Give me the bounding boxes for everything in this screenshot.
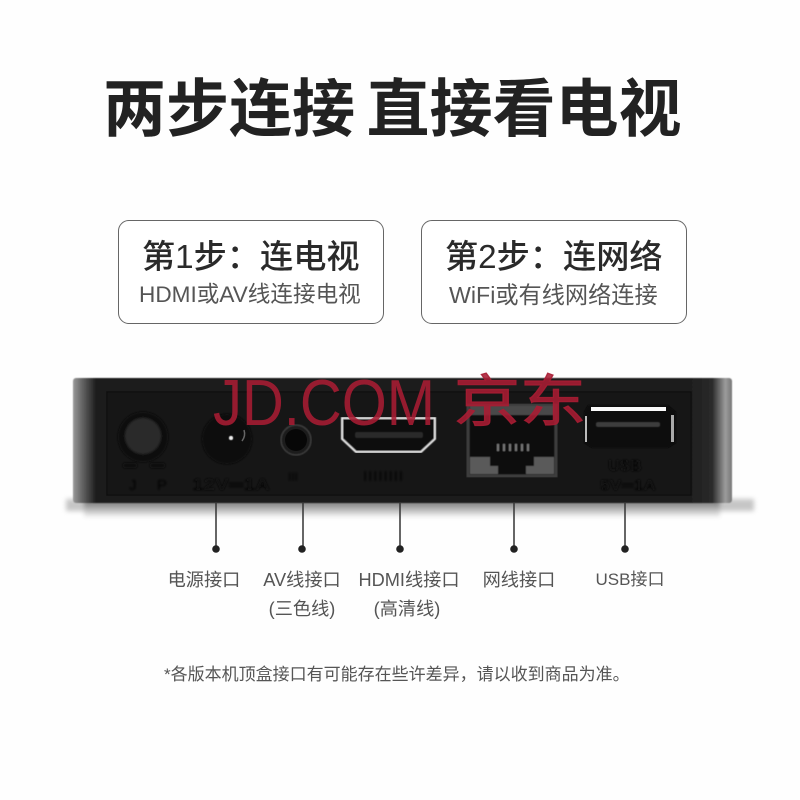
label: tricolor cable: (三色线): [269, 599, 335, 619]
label: HDMI: HDMI线接口: [358, 570, 460, 590]
port: USB: 5V═1A: [600, 477, 656, 494]
port: power button: [118, 412, 168, 494]
step 1 description: HDMI或AV线连接电视: [139, 282, 361, 307]
port: HDMI: IIIIIIII: [363, 468, 403, 485]
watermark: JD.COM: [213, 366, 586, 439]
label: AV: AV线接口: [263, 570, 341, 590]
port: AV jack: [281, 425, 311, 484]
panel: step 2: [421, 220, 687, 324]
step 1 heading: 第1步：连电视: [142, 239, 360, 276]
port: HDMI: [342, 418, 435, 485]
port: USB: USB: [608, 458, 642, 475]
label: power: 电源接口: [168, 570, 240, 590]
label: HD cable: (高清线): [374, 599, 440, 619]
device body: [73, 378, 732, 503]
label: USB: USB接口: [596, 570, 664, 589]
port: AV jack: III: [288, 470, 298, 484]
port: power button: J: [129, 477, 136, 494]
connector leaders: [212, 503, 629, 553]
port: USB: [584, 405, 676, 494]
title: 两步连接 直接看电视: [103, 75, 682, 145]
label: ethernet: 网线接口: [483, 570, 555, 590]
device shadow: [66, 498, 754, 518]
port: ethernet: [468, 405, 556, 476]
footnote: *各版本机顶盒接口有可能存在些许差异，请以收到商品为准。: [164, 665, 630, 684]
port: DC power jack: [192, 414, 270, 494]
watermark: JD.COM: JD.COM: [213, 366, 435, 439]
panel: step 1: [118, 220, 384, 324]
watermark: JD brand name: 京东: [454, 370, 586, 433]
port: DC power jack: 12V═1A: [192, 475, 270, 494]
port: power button: P: [157, 477, 167, 494]
step 2 heading: 第2步：连网络: [445, 239, 663, 276]
step 2 description: WiFi或有线网络连接: [449, 282, 658, 308]
